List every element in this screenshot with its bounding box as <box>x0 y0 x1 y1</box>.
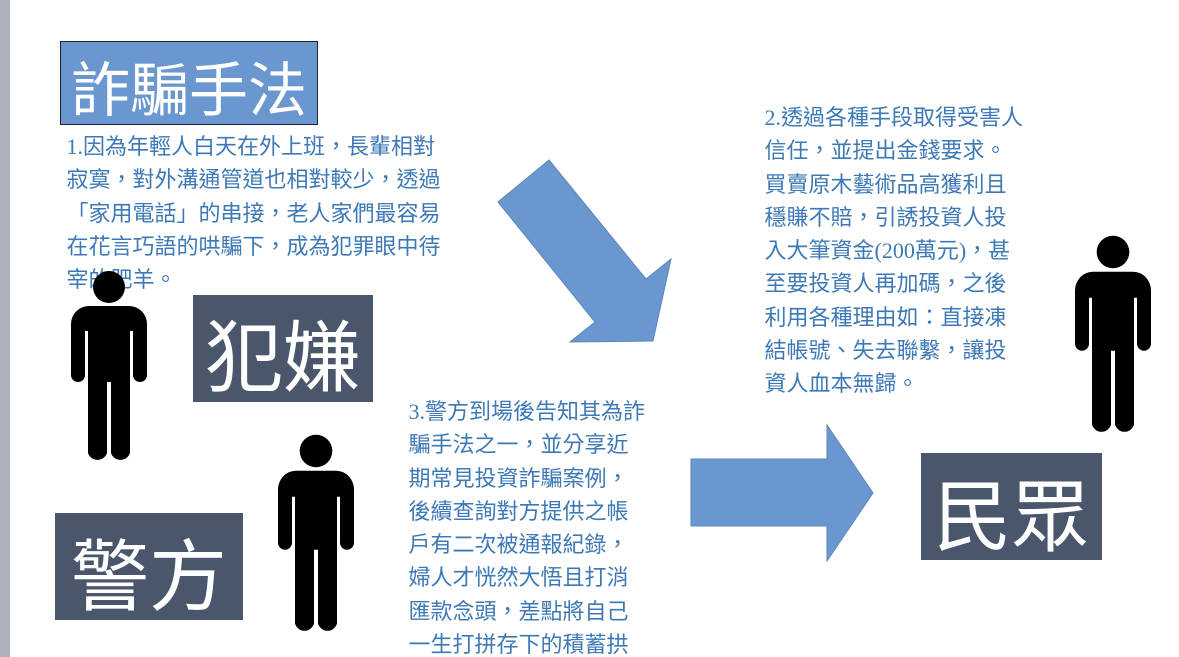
text block: step 3: 戶有二次被通報紀錄， <box>408 532 629 557</box>
text block: step 2: 2.透過各種手段取得受害人 <box>764 105 1023 130</box>
left side strip <box>0 0 10 657</box>
text block: step 2: 結帳號、失去聯繫，讓投 <box>764 338 1007 363</box>
arrow: diagonal from step 1 to step 2 <box>497 159 672 342</box>
text block: step 1: 1.因為年輕人白天在外上班，長輩相對 <box>66 134 435 159</box>
text block: step 2: 至要投資人再加碼，之後 <box>764 271 1007 296</box>
text block: step 3: 3.警方到場後告知其為詐 <box>408 399 645 424</box>
text block: step 1: 寂寞，對外溝通管道也相對較少，透過 <box>66 167 441 192</box>
text block: step 1 <box>66 134 441 292</box>
text block: step 2: 穩賺不賠，引誘投資人投 <box>764 205 1007 230</box>
text block: step 3: 後續查詢對方提供之帳 <box>408 499 629 524</box>
label: police: 警方 <box>71 533 227 621</box>
text block: step 2: 入大筆資金(200萬元)，甚 <box>764 238 1010 263</box>
text block: step 3: 匯款念頭，差點將自己 <box>408 599 629 624</box>
text block: step 3: 婦人才恍然大悟且打消 <box>408 565 629 590</box>
text block: step 2: 利用各種理由如：直接凍 <box>764 305 1007 330</box>
text block: step 3: 騙手法之一，並分享近 <box>408 432 629 457</box>
icon: public person <box>1075 236 1151 432</box>
text block: step 1: 宰的肥羊。 <box>66 267 177 292</box>
text block: step 3 <box>408 399 645 657</box>
icon: police person <box>278 434 354 631</box>
label: suspect: 犯嫌 <box>205 314 361 402</box>
text block: step 3: 一生打拼存下的積蓄拱 <box>408 632 629 657</box>
text block: step 2: 信任，並提出金錢要求。 <box>764 138 1007 163</box>
text block: step 2 <box>764 105 1023 396</box>
label: public: 民眾 <box>933 473 1090 561</box>
text block: step 3: 期常見投資詐騙案例， <box>408 466 629 491</box>
text block: step 1: 「家用電話」的串接，老人家們最容易 <box>66 201 441 226</box>
label: public <box>921 453 1102 560</box>
arrow: right from step 3 to public <box>690 424 874 562</box>
label: police <box>55 513 243 620</box>
icon: suspect person <box>71 271 147 460</box>
text block: step 2: 買賣原木藝術品高獲利且 <box>764 172 1007 197</box>
text block: step 1: 在花言巧語的哄騙下，成為犯罪眼中待 <box>66 234 441 259</box>
text block: step 2: 資人血本無歸。 <box>764 371 919 396</box>
title: fraud methods: 詐騙手法 <box>71 58 307 124</box>
